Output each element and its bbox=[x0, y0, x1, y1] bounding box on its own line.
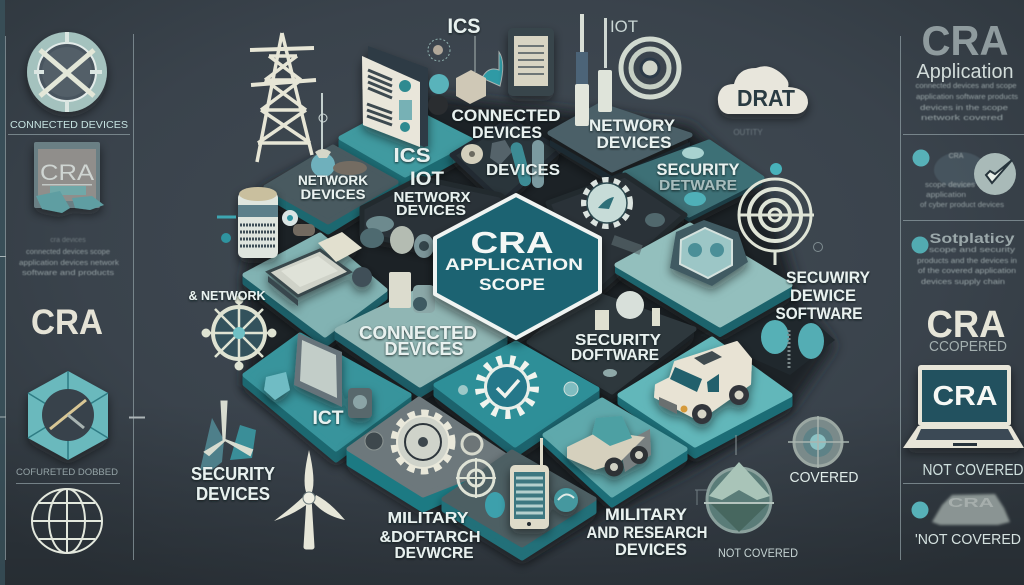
heading: CRA: CRA bbox=[31, 303, 103, 342]
label: not covered: NOT COVERED bbox=[718, 546, 798, 560]
icon: target right bbox=[738, 163, 822, 265]
label: security devices: SECURITY bbox=[191, 464, 275, 484]
label: connected devices top: CONNECTED bbox=[452, 106, 560, 125]
tile: car bbox=[545, 400, 685, 505]
icon: phone bbox=[510, 438, 578, 529]
icon: devices on connected tile bbox=[389, 272, 435, 313]
label: military and research devices: AND RESEARCH bbox=[586, 524, 708, 542]
icons: security tile bbox=[682, 147, 706, 206]
tile: dark right behind van bbox=[700, 300, 835, 375]
label: security software centre: DOFTWARE bbox=[571, 347, 659, 364]
tile: network devices left bbox=[266, 147, 396, 232]
label: security device software: SECUWIRY bbox=[786, 268, 871, 287]
tile: phone bbox=[444, 452, 594, 558]
subheading: soplaticy: Sotplaticy bbox=[930, 230, 1015, 246]
icon: turbine cluster bbox=[200, 402, 256, 470]
icon: antenna node bbox=[311, 93, 367, 177]
label: connected devices: CONNECTED DEVICES bbox=[10, 119, 128, 131]
tile: gear back bbox=[548, 175, 685, 290]
icon: laptop: CRA bbox=[932, 380, 998, 411]
icon: target lower bbox=[456, 458, 505, 518]
tile: top teal bbox=[341, 105, 471, 188]
label: network devices right: DEVICES bbox=[596, 134, 672, 152]
label: security device software: DEWICE bbox=[790, 286, 856, 305]
label: IOT top: IOT bbox=[610, 17, 638, 36]
icon: monitor on ICT tile bbox=[264, 333, 372, 418]
label: covered: COFURETED DOBBED bbox=[16, 467, 118, 478]
subheading: application: Application bbox=[916, 61, 1014, 83]
blurred paragraph bbox=[916, 83, 1019, 122]
label: military doftarch: MILITARY bbox=[388, 510, 469, 527]
blurred paragraph: network covered bbox=[921, 115, 1003, 122]
icon: small nodes bbox=[217, 210, 315, 243]
icon: hexagon tool bbox=[28, 371, 108, 460]
panel: left sidebar bbox=[10, 32, 128, 553]
tile: security software back bbox=[625, 142, 762, 222]
label: security devices bbox=[191, 464, 275, 504]
blurred description: application devices network bbox=[19, 260, 120, 267]
label: security software bbox=[656, 161, 740, 194]
icon: document bbox=[362, 46, 428, 147]
icon: antenna probes bbox=[575, 14, 612, 126]
label: connected devices lower bbox=[359, 323, 477, 359]
icon: check gear bbox=[458, 360, 578, 414]
heading: CRA application scope hexagon: CRA bbox=[470, 225, 554, 260]
subheading: covered: CCOPERED bbox=[929, 338, 1007, 355]
label: military and research devices: MILITARY bbox=[605, 506, 687, 524]
blurred description: connected devices scope bbox=[26, 249, 110, 256]
icon: transmission tower bbox=[250, 33, 316, 162]
icon: CRA card bbox=[34, 142, 104, 213]
tile: security software centre bbox=[529, 292, 694, 400]
label: security software: SECURITY bbox=[656, 161, 740, 179]
label: ICS middle: ICS bbox=[394, 145, 430, 167]
heading: CRA application scope hexagon: APPLICATION bbox=[445, 255, 583, 274]
label: IOT network devices bbox=[394, 169, 470, 219]
tile: left router bbox=[245, 235, 385, 345]
blurred block bbox=[920, 152, 1005, 209]
tile: connected devices back bbox=[452, 120, 560, 202]
icons: security software centre bbox=[595, 291, 660, 377]
dot bbox=[912, 502, 928, 518]
blurred paragraph: connected devices and scope bbox=[916, 83, 1017, 90]
icon: tablet bbox=[508, 28, 554, 96]
icon: covered target bbox=[788, 416, 849, 468]
blurred block: application bbox=[926, 192, 966, 199]
icon: network wheel bbox=[202, 296, 276, 370]
label: military and research devices: DEVICES bbox=[615, 541, 687, 559]
label: connected devices lower: CONNECTED bbox=[359, 323, 477, 343]
label: security software: DETWARE bbox=[659, 177, 737, 194]
tile: van bbox=[620, 339, 790, 456]
blurred block: CRA bbox=[949, 153, 964, 160]
icon: faded CRA stone bbox=[932, 494, 1010, 525]
dot bbox=[912, 236, 928, 254]
panel: right sidebar bbox=[903, 17, 1024, 548]
blurred description: cra devices bbox=[50, 237, 86, 244]
label: IOT network devices: NETWORX bbox=[394, 189, 470, 206]
icon: not covered shield bbox=[695, 435, 774, 532]
label: devices: DEVICES bbox=[486, 162, 560, 179]
blurred paragraph bbox=[917, 247, 1017, 286]
label: military doftarch: DEVWCRE bbox=[394, 545, 474, 562]
label: connected devices top: DEVICES bbox=[472, 123, 542, 142]
icon: laptop bbox=[903, 365, 1024, 448]
label: security device software: SOFTWARE bbox=[776, 304, 862, 323]
icons: IoT cluster bbox=[360, 216, 434, 258]
label: security software centre: SECURITY bbox=[575, 332, 661, 349]
icon: secure chip bbox=[670, 220, 748, 286]
icon: CRA card: CRA bbox=[40, 160, 94, 185]
label: IOT network devices: DEVICES bbox=[396, 202, 466, 219]
icon: wind turbine bbox=[274, 450, 345, 547]
tile: network devices back bbox=[550, 105, 690, 183]
blurred paragraph: of the covered application bbox=[918, 268, 1016, 275]
label: security software centre bbox=[571, 332, 661, 364]
label: network devices left: NETWORK bbox=[298, 173, 368, 188]
icon: database cylinder bbox=[238, 187, 278, 258]
tile: connected devices lower bbox=[337, 290, 505, 395]
label: connected devices lower: DEVICES bbox=[384, 339, 464, 359]
blurred description: software and products bbox=[22, 270, 115, 277]
icons: ICS cluster bbox=[428, 36, 503, 115]
icon: globe bbox=[32, 489, 102, 553]
label: ICS top: ICS bbox=[448, 15, 480, 38]
icon: connected devices wheel bbox=[27, 32, 107, 112]
icon: off-road vehicle bbox=[567, 416, 651, 476]
heading: CRA application scope hexagon: SCOPE bbox=[479, 275, 545, 294]
icon: gear back tile bbox=[585, 181, 629, 225]
label: military and research devices bbox=[586, 506, 708, 559]
dark underlay behind tiles bbox=[245, 95, 835, 555]
label: military doftarch bbox=[380, 510, 480, 562]
label: military doftarch: &DOFTARCH bbox=[380, 529, 480, 546]
label: network devices right: NETWORY bbox=[589, 117, 675, 135]
label: security device software bbox=[776, 268, 871, 323]
blurred paragraph: application software products bbox=[916, 94, 1019, 101]
icons: striped props bbox=[611, 213, 665, 255]
blurred paragraph: devices in the scope bbox=[920, 105, 1008, 112]
tile: ICT bbox=[245, 335, 409, 460]
blurred paragraph: devices supply chain bbox=[921, 279, 1005, 286]
dot bbox=[912, 150, 930, 166]
decorative devices on top tile bbox=[461, 140, 544, 188]
heading: CRA: CRA bbox=[922, 17, 1008, 64]
icon: target top bbox=[621, 39, 679, 97]
label: network devices left bbox=[298, 173, 368, 202]
icon: faded CRA stone: CRA bbox=[948, 495, 995, 510]
faint text: OUTITY bbox=[733, 128, 763, 137]
tile: centre check bbox=[436, 343, 597, 455]
tile: IoT network devices bbox=[362, 178, 520, 250]
icon: DRAT cloud bbox=[718, 66, 808, 114]
label: covered: COVERED bbox=[790, 469, 859, 486]
blurred description bbox=[19, 237, 120, 277]
icon: gear on grey tile bbox=[365, 414, 482, 470]
icon: check badge bbox=[974, 153, 1016, 195]
blurred block: of cyber product devices bbox=[920, 202, 1005, 209]
blurred paragraph: products and the devices in bbox=[917, 258, 1017, 265]
blurred block: scope devices bbox=[925, 182, 976, 189]
icon: teal blobs bbox=[761, 320, 824, 370]
heading: CRA application scope hexagon bbox=[435, 195, 600, 338]
heading: CRA: CRA bbox=[926, 304, 1006, 346]
tile: right large light bbox=[617, 225, 790, 335]
icons: left tile router bbox=[268, 232, 372, 306]
blurred paragraph: scope and security bbox=[929, 247, 1016, 254]
label: network devices right bbox=[589, 117, 675, 152]
tile: gear bbox=[349, 399, 512, 510]
label: & network: & NETWORK bbox=[188, 288, 266, 303]
icon: DRAT cloud: DRAT bbox=[737, 85, 795, 111]
label: network devices left: DEVICES bbox=[300, 187, 366, 202]
label: connected devices top bbox=[452, 106, 560, 142]
label: security devices: DEVICES bbox=[196, 484, 270, 504]
label: ICT: ICT bbox=[312, 408, 344, 429]
label: IOT network devices: IOT bbox=[410, 169, 444, 190]
icon: van bbox=[655, 342, 751, 424]
